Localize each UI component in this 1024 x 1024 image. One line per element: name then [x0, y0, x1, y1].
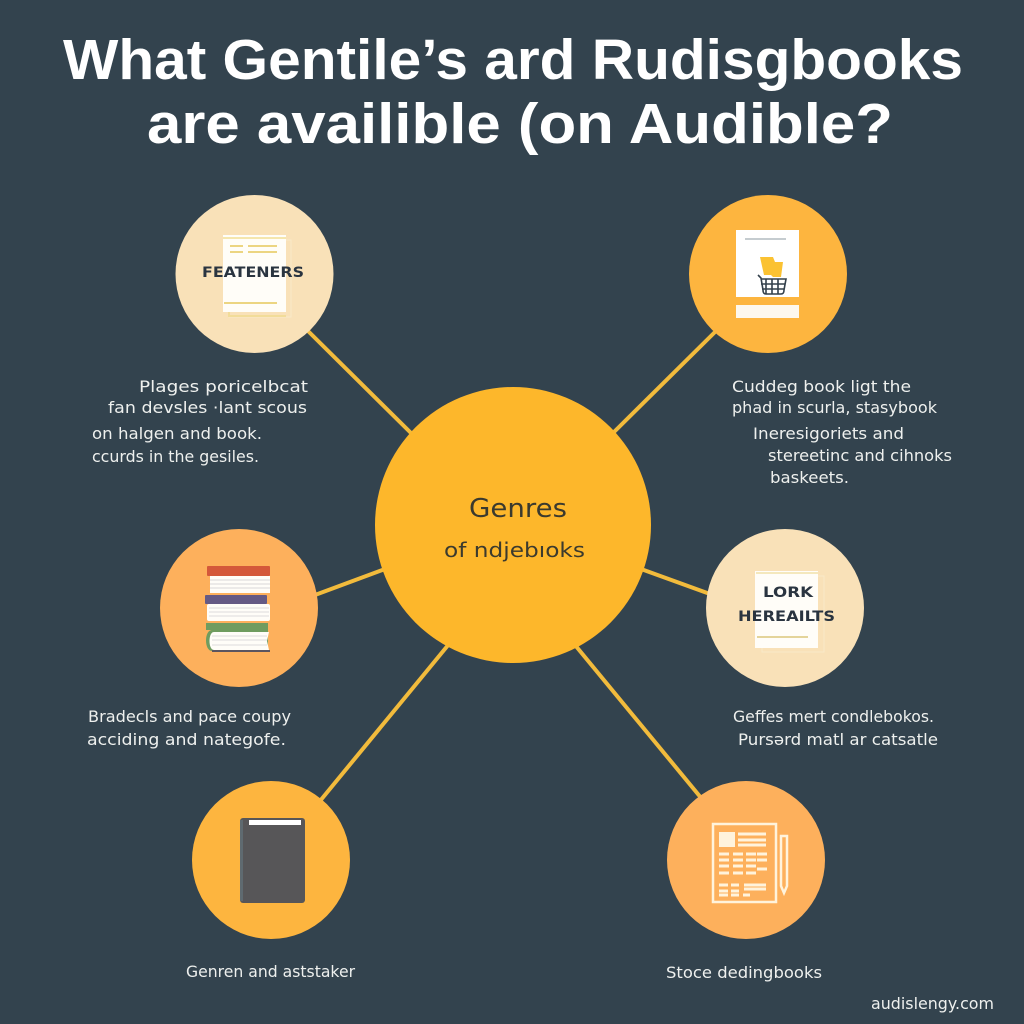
node: featured document: [176, 195, 334, 353]
text: top left description: on halgen and book.: [92, 424, 262, 443]
text: top right description: stereetinc and cihnoks: [768, 446, 952, 465]
text: top right description: [732, 377, 952, 487]
title: are availible (on Audible?: [147, 92, 893, 156]
node: book with basket: [689, 195, 847, 353]
text: top left description: ccurds in the gesiles.: [92, 447, 259, 466]
node: stacked books: [160, 529, 318, 687]
node: report document: LORK: [763, 585, 814, 601]
text: middle right description: Pursərd matl ar catsatle: [738, 730, 938, 749]
node: report document: HEREAILTS: [738, 609, 835, 625]
central hub: Genres: [469, 494, 567, 524]
text: middle left description: [87, 707, 291, 749]
text: middle left description: acciding and nategofe.: [87, 730, 286, 749]
node: newsletter and pencil: [667, 781, 825, 939]
text: website footer: audislengy.com: [871, 994, 994, 1013]
text: top left description: fan devsles ·lant scous: [108, 398, 307, 417]
title: [63, 28, 963, 156]
text: top right description: Cuddeg book ligt the: [732, 377, 911, 396]
text: bottom left caption: Genren and aststaker: [186, 962, 355, 981]
text: middle right description: [733, 707, 938, 749]
text: middle right description: Geffes mert condlebokos.: [733, 707, 934, 726]
text: middle left description: Bradecls and pace coupy: [88, 707, 291, 726]
text: top left description: Plages poricelbcat: [139, 377, 308, 396]
central hub: of ndjebıoks: [444, 538, 585, 562]
node: dark book: [192, 781, 350, 939]
text: bottom right caption: Stoce dedingbooks: [666, 963, 822, 982]
node: report document: [706, 529, 864, 687]
central hub: [375, 387, 651, 663]
text: top right description: Ineresigoriets and: [753, 424, 904, 443]
node: featured document: FEATENERS: [202, 265, 304, 281]
text: top right description: phad in scurla, stasybook: [732, 398, 938, 417]
title: What Gentile’s ard Rudisgbooks: [63, 28, 963, 92]
text: top left description: [92, 377, 308, 466]
connector lines: [308, 331, 716, 801]
text: top right description: baskeets.: [770, 468, 849, 487]
